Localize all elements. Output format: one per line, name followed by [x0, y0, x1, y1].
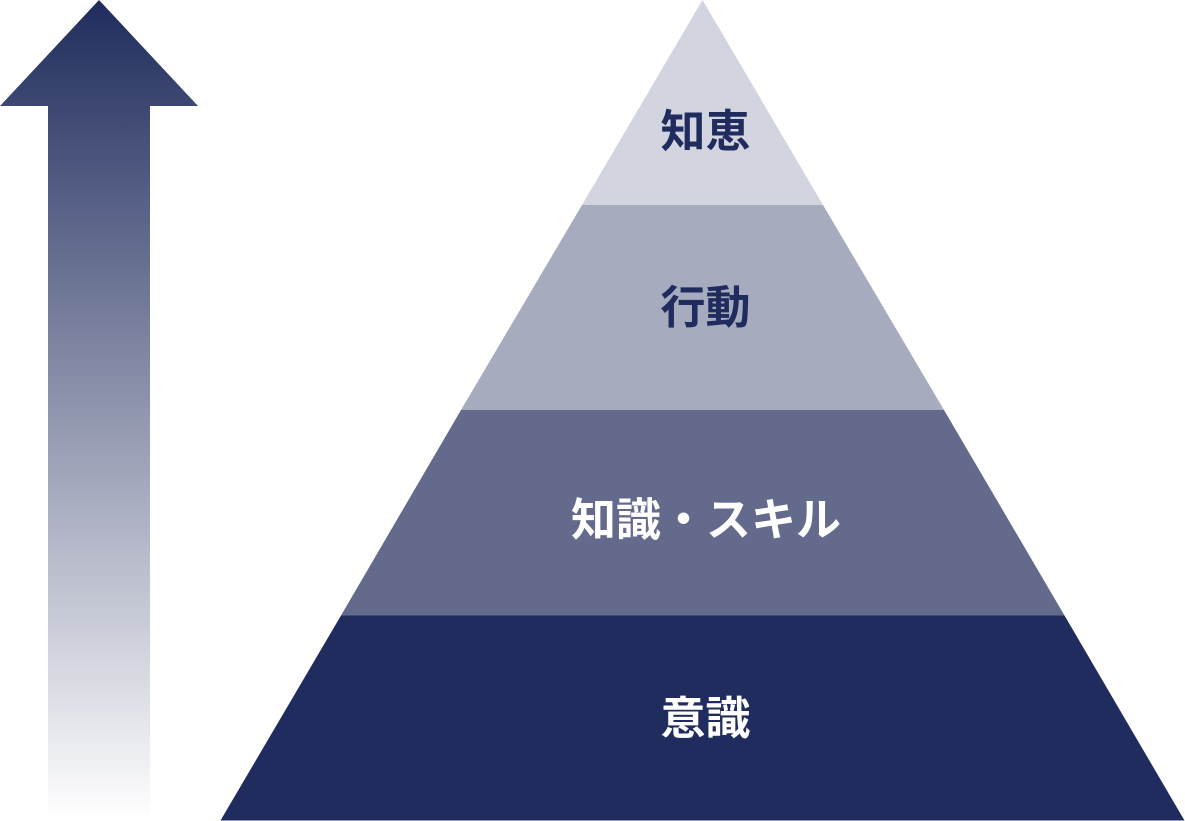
tier: 知識・スキル: [341, 410, 1064, 616]
tier: 行動: 行動: [660, 282, 751, 333]
tier: 意識: 意識: [660, 693, 751, 744]
tier: 知恵: [582, 0, 823, 205]
tier: 意識: [220, 616, 1184, 820]
tier: 行動: [461, 205, 944, 410]
tier: 知恵: 知恵: [660, 106, 751, 157]
tier: 知識・スキル: 知識・スキル: [571, 494, 841, 546]
arrow: upward gradient: [0, 0, 198, 821]
